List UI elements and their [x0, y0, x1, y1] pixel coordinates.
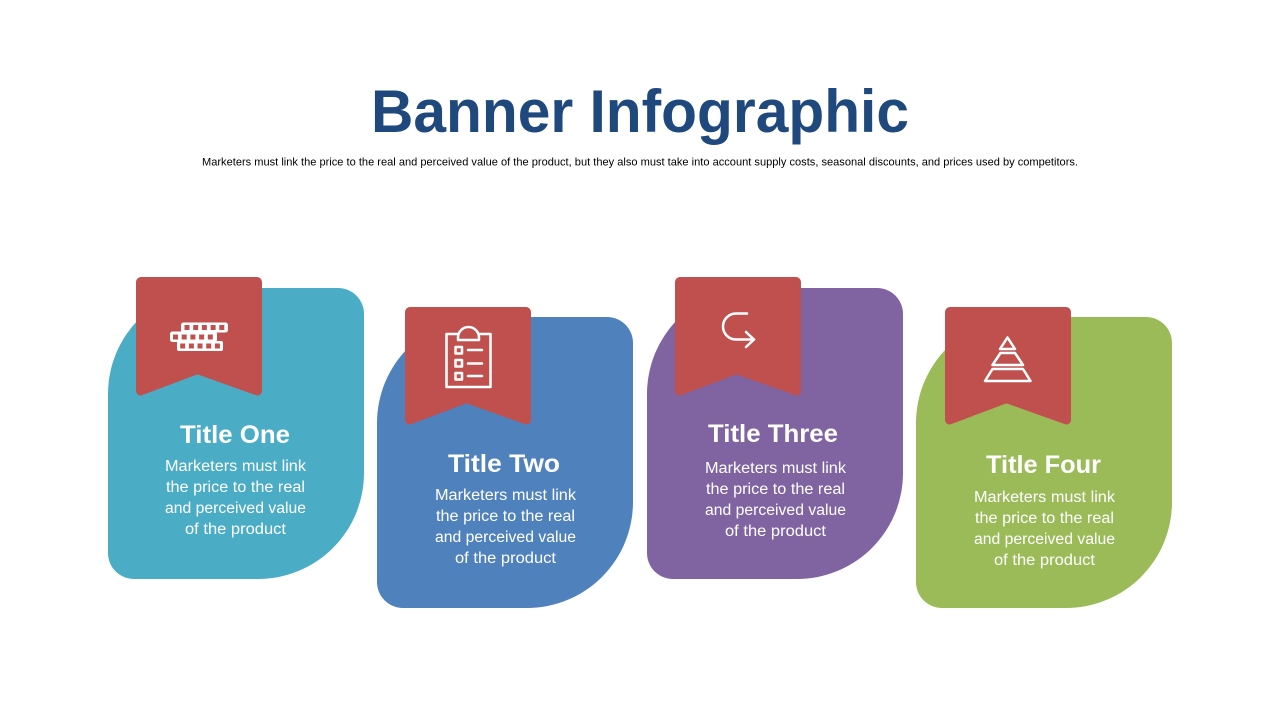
card background one [108, 288, 364, 579]
title: Banner Infographic [371, 78, 909, 145]
ribbon four [945, 307, 1071, 424]
ribbon three [675, 277, 801, 395]
icon: pyramid [985, 338, 1030, 381]
text: description one: the price to the real [166, 479, 305, 496]
text: description one: Marketers must link [165, 458, 306, 475]
panel: title four [916, 307, 1172, 608]
heading: title two: Title Two [448, 450, 560, 478]
text: description four: of the product [994, 552, 1096, 569]
ribbon two [405, 307, 531, 424]
text: description one [165, 458, 306, 538]
text: description two: and perceived value [435, 529, 576, 546]
icon: curved arrow [723, 314, 754, 347]
text: description four: Marketers must link [974, 489, 1115, 506]
subtitle: Marketers must link the price to the real and perceived value of the product, but they also must take into account supply costs, seasonal discounts, and prices used by competitors. [202, 156, 1078, 168]
text: description three [705, 460, 846, 540]
ribbon one [136, 277, 262, 395]
panel: title two [377, 307, 633, 608]
heading: title four: Title Four [986, 451, 1101, 479]
icon: bricks [170, 322, 228, 351]
text: description two: of the product [455, 550, 557, 567]
text: description four: the price to the real [975, 510, 1114, 527]
panel: title one [108, 277, 364, 579]
heading: title one: Title One [180, 421, 290, 449]
panel: title three [647, 277, 903, 579]
text: description three: and perceived value [705, 502, 846, 519]
text: description two [435, 487, 576, 567]
card background four [916, 317, 1172, 608]
text: description one: and perceived value [165, 500, 306, 517]
text: description three: the price to the real [706, 481, 845, 498]
card background three [647, 288, 903, 579]
text: description two: the price to the real [436, 508, 575, 525]
text: description four [974, 489, 1115, 569]
icon: checklist clipboard [446, 327, 490, 387]
text: description two: Marketers must link [435, 487, 576, 504]
card background two [377, 317, 633, 608]
text: description one: of the product [185, 521, 287, 538]
heading: title three: Title Three [708, 420, 838, 448]
text: description three: of the product [725, 523, 827, 540]
text: description three: Marketers must link [705, 460, 846, 477]
text: description four: and perceived value [974, 531, 1115, 548]
